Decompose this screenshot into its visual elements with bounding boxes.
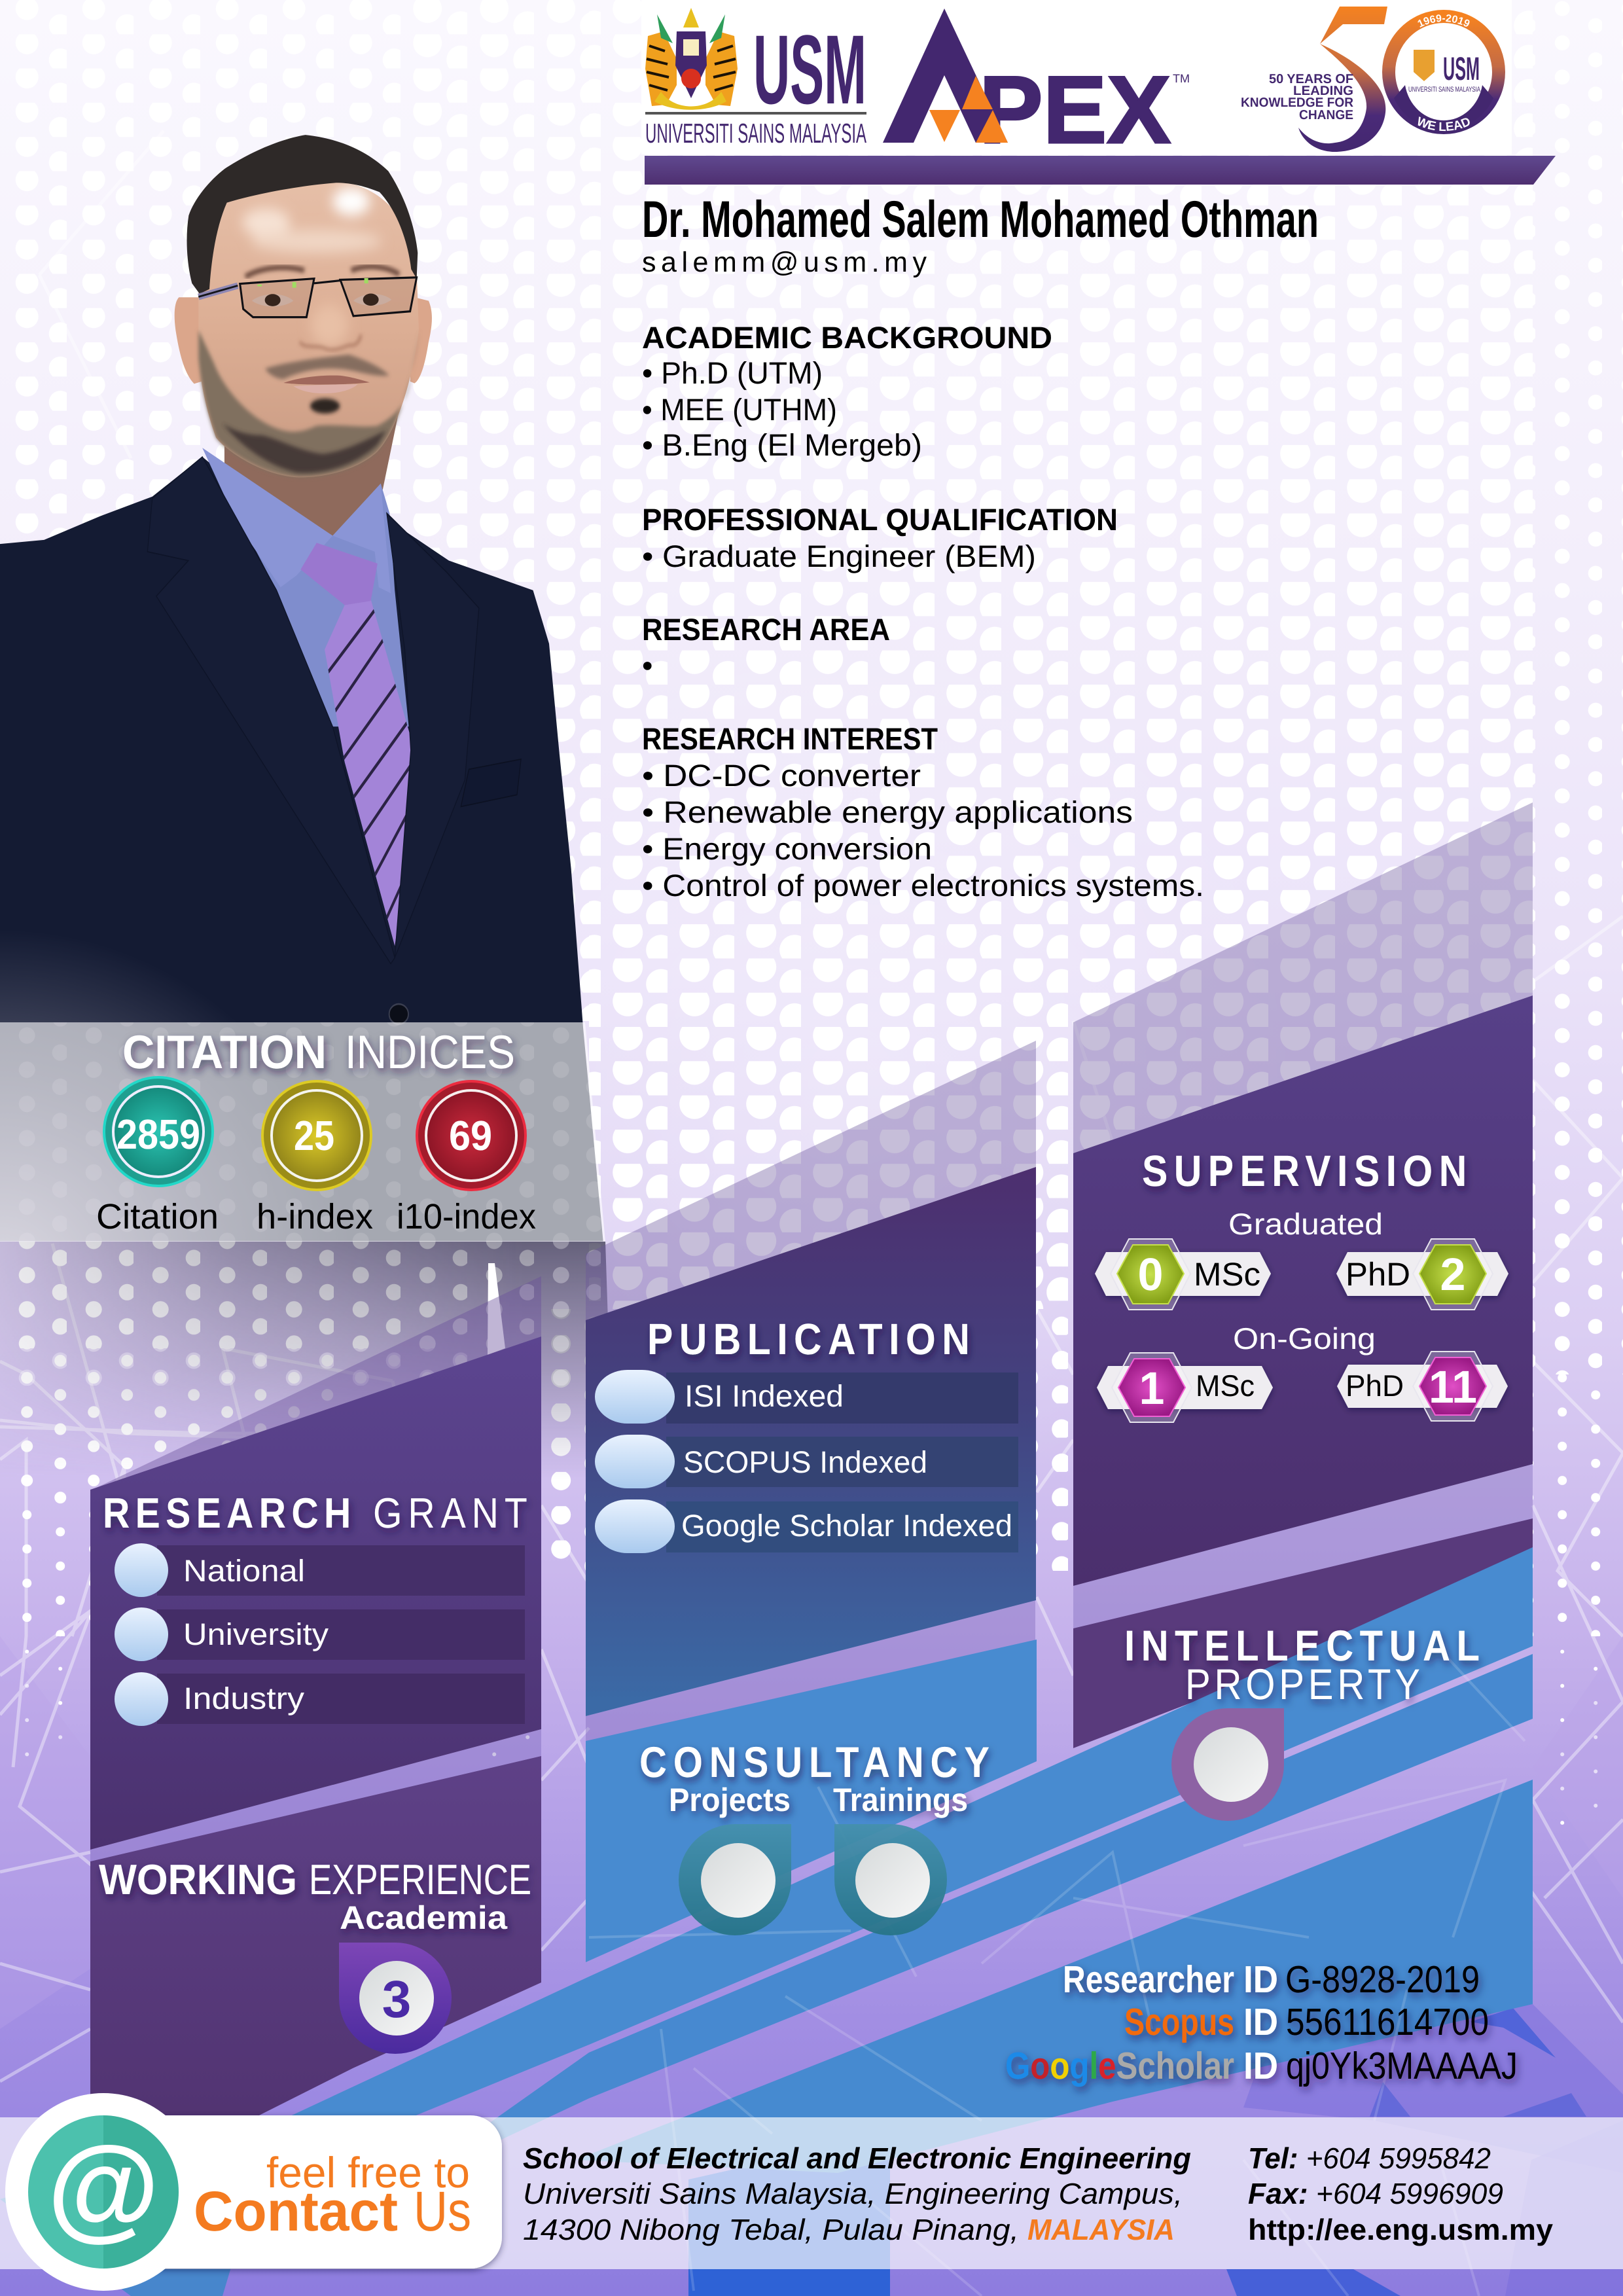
contact call to action: Contact [194,2180,398,2243]
portrait: suit jacket and head [0,383,603,1241]
academic background: • B.Eng (El Mergeb) [642,427,922,462]
scopus id: ID [1243,2001,1278,2043]
google scholar id: GoogleScholar [1005,2045,1234,2087]
h-index badge: 25 [294,1112,334,1159]
on-going MSc badge: MSc [1196,1369,1255,1403]
citation panel backdrop [0,1022,605,1242]
wordmark rule [645,112,866,115]
50 numeral five [1298,7,1387,152]
academia label: Academia [340,1899,508,1936]
row: industry [115,1672,525,1726]
i10-index badge [417,1081,526,1190]
portrait shirt [202,448,409,726]
icon: working experience drop [339,1943,452,2054]
school address: MALAYSIA [1027,2213,1175,2246]
portrait jacket [0,457,603,1241]
research grant heading: RESEARCH [103,1489,351,1537]
crest emblem [681,69,701,88]
light strips between panels [90,1464,1533,1861]
50 ring years: 1969-2019 [1418,14,1470,27]
projects label: Projects [669,1782,791,1818]
scopus id [1124,2001,1489,2043]
citation panel left light [0,929,366,1242]
research grant heading [103,1489,527,1537]
scopus id: 55611614700 [1286,2001,1489,2043]
citation heading: INDICES [345,1026,515,1079]
portrait eyes [252,294,391,306]
portrait shirt collar [202,448,391,593]
translucent facet above supervision [1073,802,1533,1158]
portrait beard shadow [223,423,386,473]
icon: projects drop [679,1824,791,1935]
panel: research grant [90,1336,541,1850]
graduated MSc badge: 0 [1138,1249,1163,1300]
icon: intellectual property drop [1171,1708,1284,1821]
citation badge: 2859 [116,1111,200,1158]
50 numeral ring [1389,16,1499,128]
intellectual property heading: PROPERTY [1185,1660,1420,1708]
i10-index label: i10-index [397,1197,536,1236]
contact details [1248,2142,1553,2246]
50 inner name: UNIVERSITI SAINS MALAYSIA [1408,86,1480,94]
research grant panel shape [90,1336,541,1850]
50 years tagline: 50 YEARS OF [1269,72,1353,86]
portrait beard stubble [198,330,420,477]
citation heading: CITATION [122,1026,327,1079]
research area: RESEARCH AREA [642,612,890,647]
portrait pocket [461,759,521,806]
portrait nose [300,304,361,350]
graduated PhD badge: PhD [1346,1256,1410,1293]
supervision heading: SUPERVISION [1142,1147,1467,1196]
on-going PhD badge: 11 [1429,1361,1477,1412]
on-going PhD badge [1337,1352,1508,1421]
intellectual property heading [1124,1621,1480,1708]
h-index label: h-index [257,1197,373,1236]
working experience heading: WORKING [99,1856,297,1903]
name: Dr. Mohamed Salem Mohamed Othman [642,190,1319,248]
portrait head [175,135,432,477]
lower jacket translucent fade [0,1242,607,1466]
row: national: National [183,1553,305,1588]
crest plumes [657,14,725,43]
row: ISI indexed: ISI Indexed [685,1378,844,1413]
icon: working experience drop: 3 [382,1970,411,2028]
contact pill [103,2115,502,2269]
citation badge [104,1077,213,1186]
contact details: http://ee.eng.usm.my [1248,2213,1553,2246]
50 years tagline: CHANGE [1299,108,1353,122]
research area: • [642,648,652,683]
deep blue facets behind the bands [688,2003,1623,2296]
portrait button [389,1004,408,1024]
crest centre [683,39,699,56]
academic background [642,320,1052,462]
google scholar id: ID [1243,2045,1278,2087]
graduated MSc badge: MSc [1194,1256,1260,1293]
row: Scopus indexed [595,1435,1018,1488]
citation heading [122,1026,515,1079]
publication heading: PUBLICATION [647,1315,970,1364]
row: national [115,1543,525,1597]
row: industry: Industry [183,1681,305,1715]
academic background: • Ph.D (UTM) [642,355,823,390]
50 years tagline: LEADING [1293,84,1353,98]
portrait mouth [283,376,370,393]
50 years tagline: KNOWLEDGE FOR [1241,96,1354,110]
portrait lens tint [241,278,416,317]
portrait ears [175,297,432,384]
school address: 14300 Nibong Tebal, Pulau Pinang, [523,2213,1019,2246]
icon: contact at sign [5,2093,202,2291]
APEX letters: PEX [979,56,1171,163]
panel: working experience [90,1756,541,2121]
graduated PhD badge: 2 [1440,1249,1465,1300]
row: university: University [183,1617,329,1651]
academic background: ACADEMIC BACKGROUND [642,320,1052,355]
panel: intellectual property backing [1073,1518,1533,1748]
i10-index badge: 69 [449,1112,492,1159]
trainings label: Trainings [833,1782,968,1818]
logo: APEX [883,9,1190,163]
crest tigers [645,31,738,106]
on-going MSc badge [1097,1353,1273,1422]
university name: UNIVERSITI SAINS MALAYSIA [645,118,866,149]
academic background: • MEE (UTHM) [642,392,837,427]
research grant heading: GRANT [373,1489,527,1537]
contact strip [0,2117,1623,2269]
publication panel shape [586,1167,1036,1716]
APEX purple triangle [962,110,991,143]
50 ring motto: WE LEAD [1418,117,1470,131]
on-going label: On-Going [1233,1321,1376,1355]
crest shield [675,31,707,98]
graduated label: Graduated [1228,1207,1383,1241]
h-index badge [262,1081,371,1190]
research interest: • Energy conversion [642,831,932,866]
school address [523,2142,1191,2246]
working experience heading [99,1856,531,1903]
researcher id: ID [1243,1958,1278,2001]
header logo backdrop [641,0,1512,154]
research interest: • Control of power electronics systems. [642,868,1204,903]
contact call to action: feel free to [266,2148,470,2197]
icon: contact at sign: @ [47,2123,160,2251]
researcher id: Researcher [1063,1958,1234,2001]
blue diagonal bands [0,1547,1533,2296]
working experience heading: EXPERIENCE [309,1856,531,1903]
professional qualification [642,502,1118,573]
research interest: • Renewable energy applications [642,795,1133,829]
icon: trainings drop [834,1824,947,1935]
portrait forehead highlights [242,187,382,253]
researcher id: G-8928-2019 [1285,1958,1480,2001]
professional qualification: PROFESSIONAL QUALIFICATION [642,502,1118,537]
researcher IDs [1005,1958,1518,2087]
citation label: Citation [96,1197,219,1236]
portrait eyebrows [245,266,399,277]
school address: Universiti Sains Malaysia, Engineering Campus, [523,2177,1183,2210]
email: salemm@usm.my [642,247,927,278]
working experience panel shape [90,1756,541,2121]
row: Google Scholar indexed: Google Scholar Indexed [681,1508,1012,1543]
scopus id: Scopus [1124,2001,1234,2043]
research area [642,612,890,683]
portrait glasses [198,278,417,317]
intellectual property heading: INTELLECTUAL [1124,1621,1480,1670]
portrait face [198,181,419,477]
header bar [645,156,1556,185]
contact details: Tel: +604 5995842 [1248,2142,1491,2175]
logo: USM 50 years [1241,7,1505,152]
50 years tagline [1241,72,1354,122]
professional qualification: • Graduate Engineer (BEM) [642,539,1036,573]
supervision panel shape [1073,996,1533,1586]
APEX letter A [883,9,1008,143]
citation panel dots [0,1022,605,1242]
crest ribbon [654,92,726,110]
logo: USM crest and wordmark [645,8,866,149]
portrait lapels [147,457,479,963]
graduated MSc badge [1095,1239,1271,1310]
crest sun [683,8,699,27]
google scholar id [1005,2045,1518,2087]
contact call to action: Us [414,2180,471,2243]
researcher id [1063,1958,1480,2001]
row: university [115,1607,525,1661]
google scholar id: qj0Yk3MAAAAJ [1286,2045,1518,2087]
research interest: RESEARCH INTEREST [642,721,938,756]
research interest [642,721,1204,903]
APEX trademark: TM [1173,72,1190,85]
panel: publication [586,1167,1036,1716]
graduated PhD badge [1336,1239,1508,1310]
portrait tie [300,543,413,946]
contact call to action [194,2148,471,2243]
translucent facet above research grant [91,1276,541,1490]
portrait moustache [265,355,389,379]
contact details: Fax: +604 5996909 [1248,2177,1503,2210]
panel: supervision [1073,996,1533,1586]
panel: citation indices [0,929,605,1242]
50 inner wordmark: USM [1443,50,1480,87]
on-going MSc badge: 1 [1139,1363,1164,1414]
portrait neck [224,383,405,543]
portrait hair [187,135,418,294]
translucent facet above publication [586,1041,1036,1325]
row: Scopus indexed: SCOPUS Indexed [683,1444,927,1479]
portrait goatee [310,399,340,414]
50 ring bottom thickening [1394,85,1493,130]
consultancy heading: CONSULTANCY [639,1738,990,1786]
research interest: • DC-DC converter [642,758,921,793]
50 inner crest [1414,50,1435,81]
portrait lens glints [257,278,368,288]
on-going PhD badge: PhD [1346,1369,1404,1403]
row: ISI indexed [595,1370,1018,1424]
school address: School of Electrical and Electronic Engineering [523,2142,1191,2175]
APEX orange triangles [929,76,1008,143]
panel: consultancy [586,1640,1037,1962]
row: Google Scholar indexed [595,1499,1018,1553]
USM wordmark: USM [753,14,866,124]
